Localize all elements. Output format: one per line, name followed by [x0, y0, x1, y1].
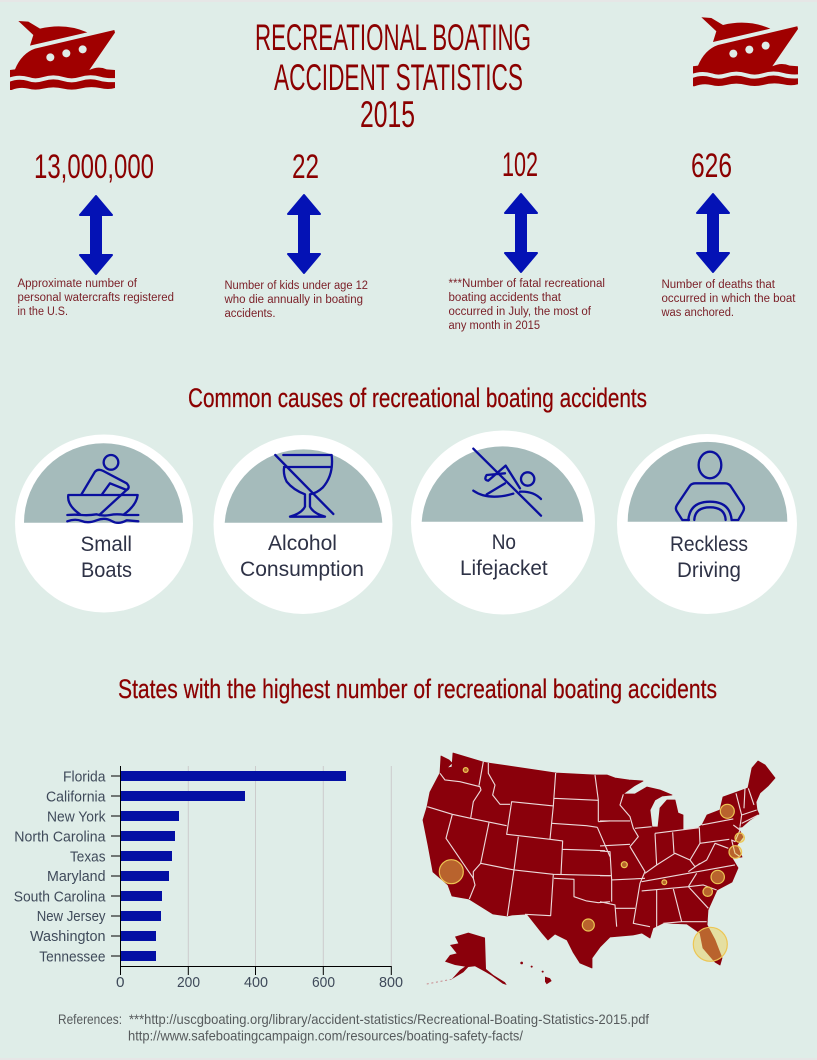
icon: crossed-out wine glass [275, 455, 333, 517]
icon: driver [676, 452, 744, 520]
category labels: Washington [30, 928, 106, 945]
map: western state borders [427, 762, 610, 916]
panel: no lifejacket: Lifejacket [460, 557, 548, 580]
category labels: New York [47, 808, 106, 826]
stat: 102 fatal accidents in July: boating accidents that [448, 292, 562, 304]
panel: alcohol consumption [214, 435, 392, 614]
stat: 13,000,000 registered watercraft: 13,000,000 [34, 148, 154, 186]
stat: 13,000,000 registered watercraft [18, 148, 174, 318]
map: Hawaii [520, 962, 552, 984]
stat: 22 kids: accidents. [224, 308, 276, 320]
category labels: South Carolina [14, 888, 106, 906]
map land [423, 753, 775, 968]
category labels: Florida [63, 768, 106, 786]
panel: reckless driving: Reckless [670, 533, 748, 556]
panel: no lifejacket: No [492, 531, 516, 554]
panel: small boats: Boats [81, 559, 132, 582]
references: ***http://uscgboating.org/library/accident-statistics/Recreational-Boating-Statistics-2015.pdf [129, 1011, 649, 1027]
title: RECREATIONAL BOATING [255, 17, 531, 58]
category labels: Texas [70, 848, 106, 866]
references [58, 1011, 649, 1044]
stat: 626 deaths anchored: was anchored. [661, 307, 734, 319]
stat: 13,000,000 registered watercraft: in the U.S. [18, 306, 68, 318]
panel: alcohol consumption: Consumption [240, 558, 364, 581]
heading: common causes: Common causes of recreational boating accidents [188, 383, 647, 413]
category labels [14, 768, 106, 966]
category labels: Maryland [47, 868, 106, 885]
stat: 626 deaths anchored: 626 [691, 147, 732, 185]
map: bubbles [439, 768, 744, 961]
panel: small boats [15, 434, 193, 612]
category labels: Tennessee [39, 948, 105, 966]
panel: reckless driving [617, 434, 797, 614]
icon: rower [67, 455, 138, 523]
stat: 13,000,000 registered watercraft: personal watercrafts registered [18, 292, 174, 304]
references: References: [58, 1011, 122, 1027]
axis labels: 200 [177, 974, 200, 991]
map: eastern state borders [600, 788, 758, 928]
stat: 102 fatal accidents in July: any month in 2015 [448, 320, 540, 332]
panel: reckless driving: Driving [677, 559, 741, 582]
stat: 22 kids: who die annually in boating [224, 294, 363, 306]
axis labels: 0 [116, 974, 124, 991]
stat: 102 fatal accidents in July: ***Number of fatal recreational [448, 278, 605, 290]
map: United States with accident bubbles [423, 753, 775, 985]
category labels: North Carolina [14, 828, 106, 846]
axis labels [116, 974, 403, 991]
bar chart: accidents by state [14, 766, 403, 991]
stat: 22 kids: 22 [292, 148, 319, 186]
references: http://www.safeboatingcampaign.com/resources/boating-safety-facts/ [128, 1028, 523, 1044]
category labels: New Jersey [37, 908, 106, 925]
stat: 102 fatal accidents in July: occurred in July, the most of [448, 306, 592, 318]
stat: 626 deaths anchored: occurred in which the boat [662, 293, 796, 305]
category labels: California [46, 788, 106, 806]
axis labels: 400 [244, 974, 268, 991]
panel: no lifejacket [411, 430, 595, 614]
title: ACCIDENT STATISTICS [274, 57, 523, 98]
stat: 102 fatal accidents in July [448, 146, 605, 332]
stat: 22 kids: Number of kids under age 12 [224, 280, 368, 292]
stat: 13,000,000 registered watercraft: Approximate number of [18, 278, 138, 290]
stat: 626 deaths anchored [661, 147, 796, 319]
bars [120, 771, 346, 961]
map: Alaska [427, 933, 507, 985]
title [255, 17, 531, 135]
axis labels: 800 [379, 974, 403, 991]
axis labels: 600 [312, 974, 335, 991]
stat: 102 fatal accidents in July: 102 [502, 146, 538, 184]
icon: crossed-out swimmer [473, 449, 541, 516]
stat: 22 kids [224, 148, 368, 320]
title: 2015 [360, 94, 415, 135]
panel: alcohol consumption: Alcohol [268, 532, 337, 555]
icon: yacht right [691, 17, 800, 86]
panel: small boats: Small [80, 533, 132, 556]
icon: yacht left [8, 21, 117, 90]
stat: 626 deaths anchored: Number of deaths that [662, 279, 776, 291]
